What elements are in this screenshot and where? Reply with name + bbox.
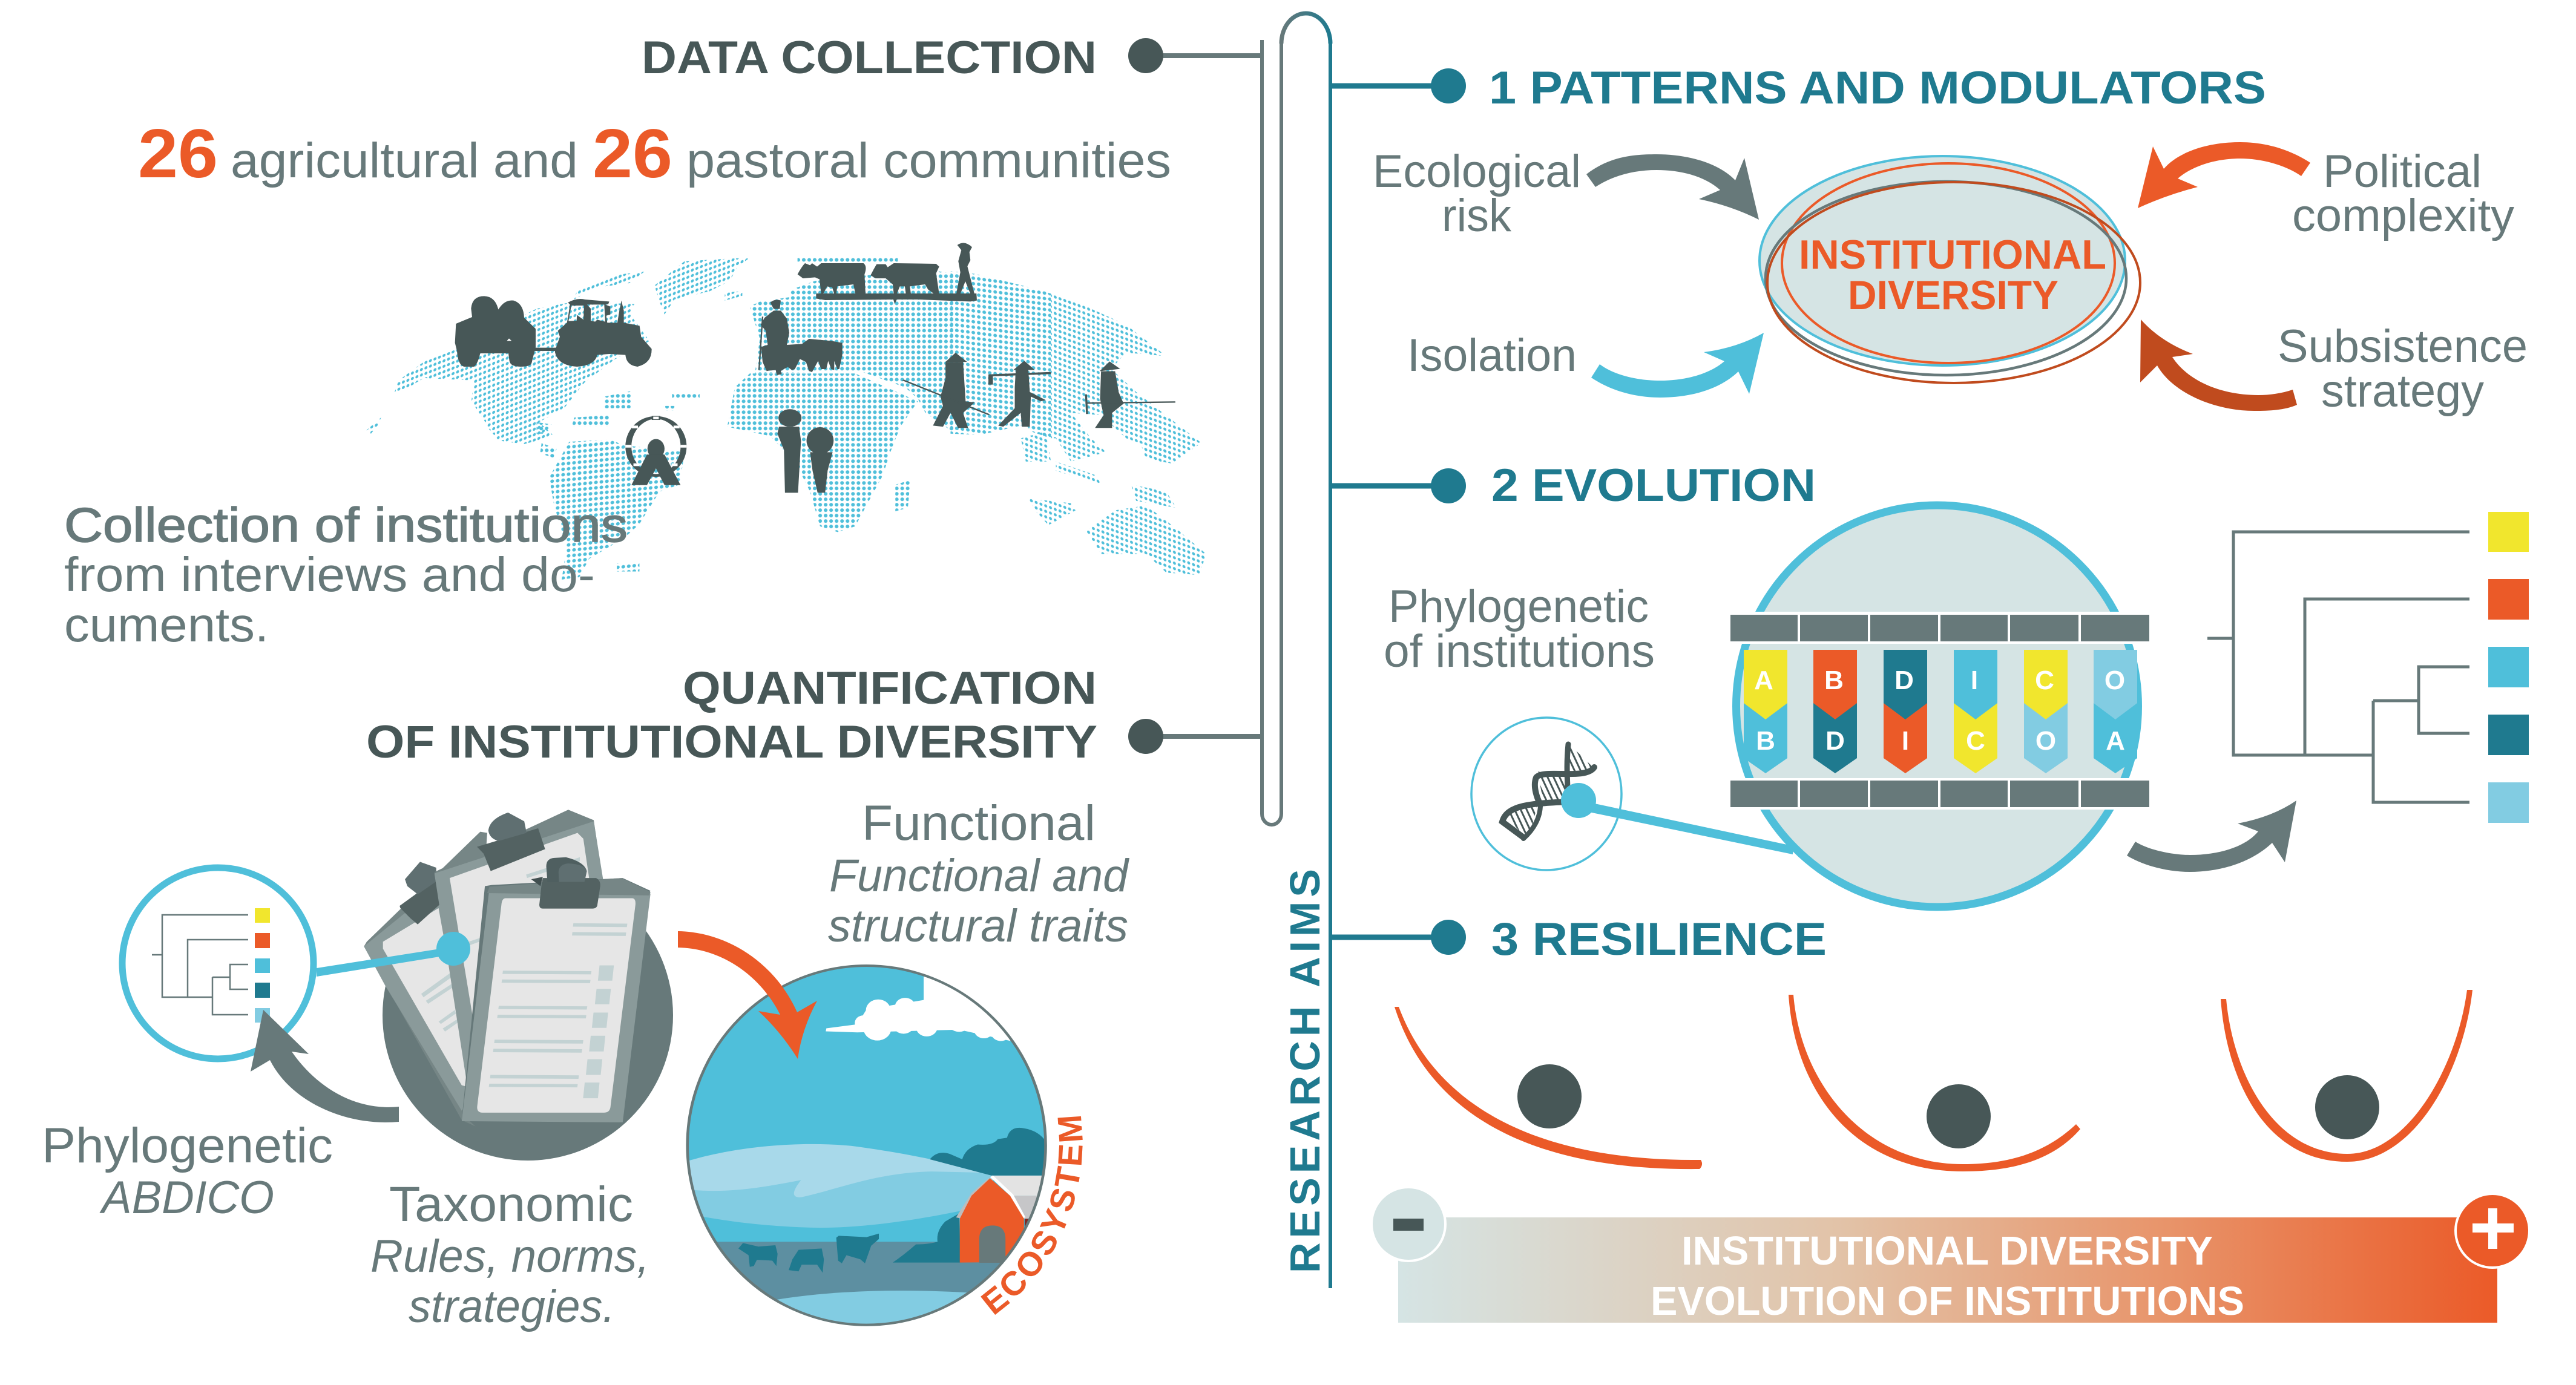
heading: 3 resilience: 3 RESILIENCE	[1491, 914, 1827, 965]
headline: communities count: 26	[593, 116, 672, 192]
map dots: east Asia and Oceania	[1021, 293, 1206, 575]
icon: farmers with tools	[903, 353, 1175, 428]
resilience basin: shallow	[1395, 1007, 1702, 1169]
labels: modulators: Political	[2323, 146, 2482, 197]
gradient bar	[1398, 1217, 2497, 1324]
cows	[738, 1234, 879, 1273]
icon: cattle herder	[798, 243, 977, 304]
labels: modulators: Isolation	[1407, 330, 1577, 381]
icon: wheel figure	[625, 416, 686, 485]
diagram: institutional diversity rings	[1760, 156, 2140, 383]
heading: 3 resilience	[1330, 914, 1827, 965]
middle clipboard	[434, 810, 604, 1092]
text: collection of institutions: cuments.	[64, 598, 269, 652]
back clipboard	[364, 832, 487, 1127]
arrow: taxonomic to ecosystem	[678, 931, 817, 1059]
label: ecosystem: ECOSYSTEM	[981, 1116, 1083, 1315]
labels: modulators: Subsistence	[2278, 321, 2528, 372]
callout line: DNA to circle	[1561, 783, 1793, 854]
callout line: clipboards to tree	[317, 932, 470, 977]
label: functional	[828, 796, 1130, 952]
chip letters: D	[1825, 726, 1845, 756]
labels: modulators: strategy	[2321, 365, 2484, 417]
heading: 2 evolution	[1330, 460, 1816, 511]
phylogenetic tree with colour tips	[2207, 512, 2529, 823]
resilience basin: deep	[2221, 990, 2472, 1162]
label: phylogenetic: Phylogenetic	[42, 1118, 333, 1173]
text: collection of institutions: from interviews and do-	[64, 548, 595, 601]
label: phylogenetic of institutions	[1384, 581, 1655, 677]
icon: shepherd with sheep	[759, 300, 843, 375]
label: research aims: RESEARCH AIMS	[1281, 869, 1329, 1273]
chip letters: D	[1894, 666, 1914, 695]
chip letters: B	[1824, 666, 1844, 695]
chip letters: C	[2035, 666, 2054, 695]
ground	[685, 1242, 1049, 1329]
heading: quantification	[366, 663, 1097, 768]
landscape ecosystem circle	[686, 964, 1047, 1326]
chip letters: A	[1754, 666, 1773, 695]
chip letters: I	[1902, 726, 1909, 756]
heading: 2 evolution: 2 EVOLUTION	[1491, 460, 1816, 511]
labels: modulators: risk	[1442, 190, 1512, 241]
heading: quantification: QUANTIFICATION	[683, 663, 1097, 714]
icon: women carrying loads	[777, 409, 833, 493]
chips: O/A	[2094, 650, 2137, 773]
icon: people and tools	[625, 353, 1175, 493]
map dots: South America	[549, 439, 685, 580]
top rail segments	[1730, 615, 2149, 641]
label: phylogenetic of institutions: of institutions	[1384, 626, 1655, 677]
headline: communities count: pastoral communities	[686, 133, 1171, 188]
map dots: Europe and Africa	[728, 258, 956, 532]
arrow: DNA to tree	[2127, 801, 2296, 872]
bottom rail segments	[1730, 781, 2149, 807]
connector: quantification	[1128, 719, 1262, 754]
gradient bar: EVOLUTION OF INSTITUTIONS	[1651, 1279, 2244, 1324]
labels: modulators: Ecological	[1373, 146, 1581, 197]
central timeline tube	[1262, 13, 1330, 1288]
resilience basin: medium	[1789, 995, 2080, 1171]
chips: B/D	[1813, 650, 1857, 773]
check lines	[489, 923, 627, 1098]
chip letters: A	[2106, 726, 2125, 756]
diagram: institutional diversity rings: DIVERSITY	[1848, 272, 2058, 318]
chip letters: C	[1966, 726, 1985, 756]
arrow: isolation	[1591, 333, 1764, 398]
cloud	[826, 977, 1011, 1041]
heading: data collection: DATA COLLECTION	[642, 32, 1097, 83]
text: collection of institutions	[64, 498, 628, 652]
chip letters: O	[2104, 666, 2125, 695]
icon: clipboards	[364, 810, 651, 1127]
world map with dots and silhouettes	[366, 243, 1206, 580]
chips: A/B	[1744, 650, 1787, 773]
icon: DNA circle	[1471, 718, 1622, 870]
map dots: North America	[366, 258, 750, 444]
label: functional: Functional	[862, 796, 1096, 851]
arrow: taxonomic to phylogenetic	[251, 1010, 399, 1122]
label: taxonomic: strategies.	[409, 1281, 615, 1332]
mini tree circle	[122, 868, 314, 1059]
connector: data collection	[1128, 38, 1262, 73]
chips: D/I	[1884, 650, 1927, 773]
magnified DNA circle	[1726, 505, 2153, 907]
heading: 1 patterns and modulators: 1 PATTERNS AND MODULATORS	[1489, 62, 2266, 114]
heading: quantification: OF INSTITUTIONAL DIVERSITY	[366, 716, 1097, 768]
label: taxonomic: Rules, norms,	[370, 1231, 649, 1282]
label: phylogenetic	[42, 1118, 333, 1223]
chip letters: B	[1756, 726, 1775, 756]
label: phylogenetic: ABDICO	[99, 1172, 274, 1223]
chip letters	[1754, 666, 2125, 756]
label: functional: structural traits	[828, 900, 1128, 952]
trees	[930, 1128, 1049, 1176]
chips: C/O	[2024, 650, 2068, 773]
diagram: institutional diversity rings: INSTITUTIONAL	[1799, 232, 2106, 278]
labels: modulators	[1373, 146, 2528, 417]
label: taxonomic	[370, 1177, 649, 1332]
headline: communities count: agricultural and	[231, 133, 578, 188]
labels: modulators: complexity	[2292, 190, 2514, 241]
front clipboard	[462, 857, 651, 1122]
chip letters: I	[1971, 666, 1978, 695]
arrow: ecological risk	[1586, 154, 1759, 220]
gradient bar: INSTITUTIONAL DIVERSITY	[1681, 1228, 2213, 1274]
label: phylogenetic of institutions: Phylogenetic	[1388, 581, 1649, 632]
map dots	[366, 258, 1206, 580]
barn	[956, 1176, 1049, 1263]
icon: tractor with hay	[455, 296, 652, 367]
map dots: Caribbean islands	[537, 391, 700, 458]
map dots: central Asia	[950, 271, 1051, 438]
chips: I/C	[1954, 650, 1997, 773]
arrow: political complexity	[2138, 142, 2310, 208]
taxonomic dark disc	[383, 870, 673, 1161]
minus badge	[1372, 1187, 1445, 1261]
arrow: subsistence strategy	[2140, 319, 2297, 411]
plus badge	[2456, 1194, 2529, 1268]
label: taxonomic: Taxonomic	[389, 1177, 633, 1232]
headline: communities count	[138, 116, 1171, 192]
hills	[689, 1144, 993, 1197]
chip letters: O	[2036, 726, 2056, 756]
label: functional: Functional and	[829, 850, 1130, 902]
text: collection of institutions: Collection of institutions	[64, 498, 628, 552]
headline: communities count: 26	[138, 116, 218, 192]
